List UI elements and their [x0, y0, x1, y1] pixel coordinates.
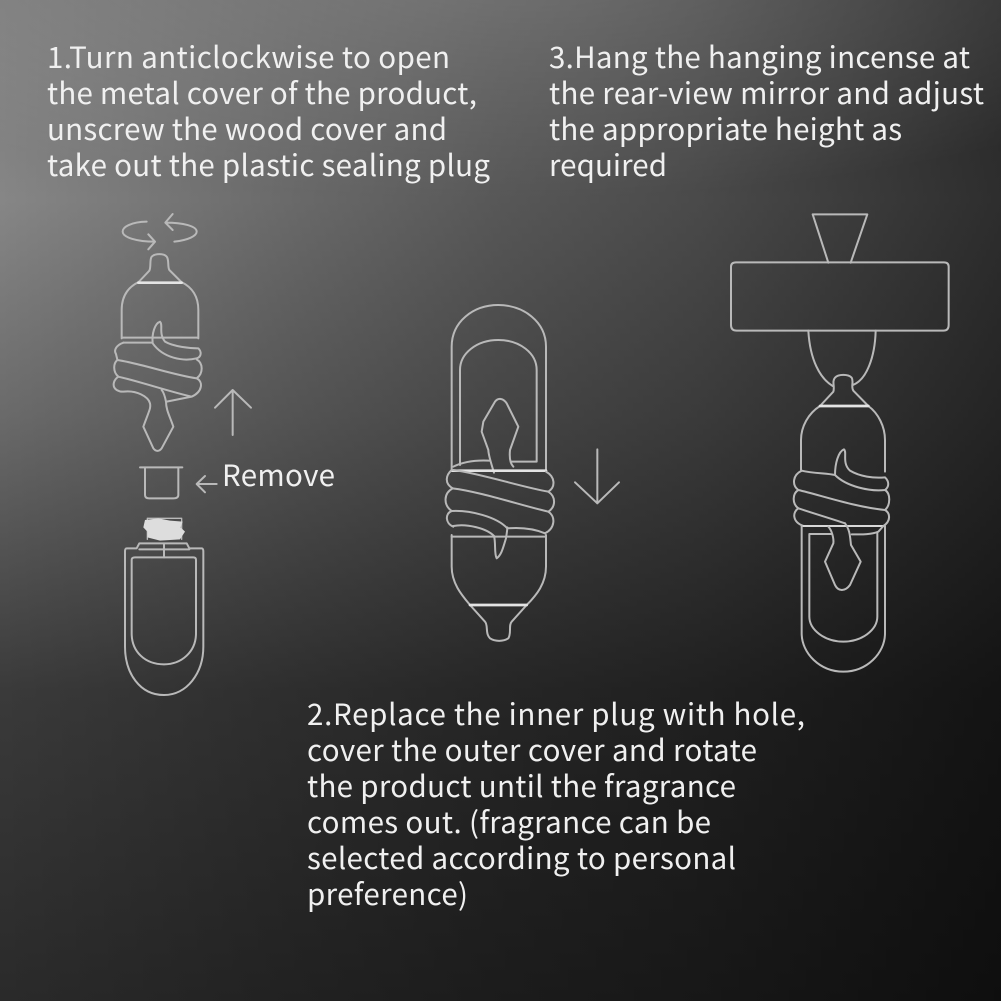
icon: metal cover with threaded neck — [125, 518, 203, 695]
text block: step 1: 1.Turn anticlockwise to open — [47, 35, 450, 77]
text block: step 3: the rear-view mirror and adjust — [549, 71, 984, 113]
text block: step 2: cover the outer cover and rotate — [307, 728, 757, 770]
text block: step 2: comes out. (fragrance can be — [307, 800, 711, 842]
text block: step 3: required — [549, 143, 667, 185]
text block: step 2: the product until the fragrance — [307, 764, 736, 806]
text block: step 3: 3.Hang the hanging incense at — [549, 35, 970, 77]
text block: step 2: preference) — [307, 872, 468, 914]
text block: step 1 — [47, 35, 490, 185]
text block: step 2 — [307, 692, 805, 914]
text block: step 2: selected according to personal — [307, 836, 736, 878]
text block: step 1: unscrew the wood cover and — [47, 107, 447, 149]
text block: step 3: the appropriate height as — [549, 107, 902, 149]
icon: hanging product, step 3 — [794, 331, 889, 672]
icon: up arrow — [215, 390, 251, 435]
text block: step 3 — [549, 35, 984, 185]
icon: bottle with wood cover and plug, step 1 — [114, 254, 202, 451]
text block: step 2: 2.Replace the inner plug with hole, — [307, 692, 805, 734]
text block: step 1: the metal cover of the product, — [47, 71, 477, 113]
icon: plastic sealing plug — [140, 467, 182, 498]
icon: rotate arrows — [123, 214, 197, 249]
icon: left arrow to plug — [197, 476, 217, 492]
icon: rear-view mirror — [731, 214, 949, 331]
text block: step 1: take out the plastic sealing plug — [47, 143, 490, 185]
label: Remove: Remove — [222, 453, 335, 495]
icon: assembled product, step 2 — [446, 305, 554, 641]
icon: down arrow — [575, 449, 619, 503]
